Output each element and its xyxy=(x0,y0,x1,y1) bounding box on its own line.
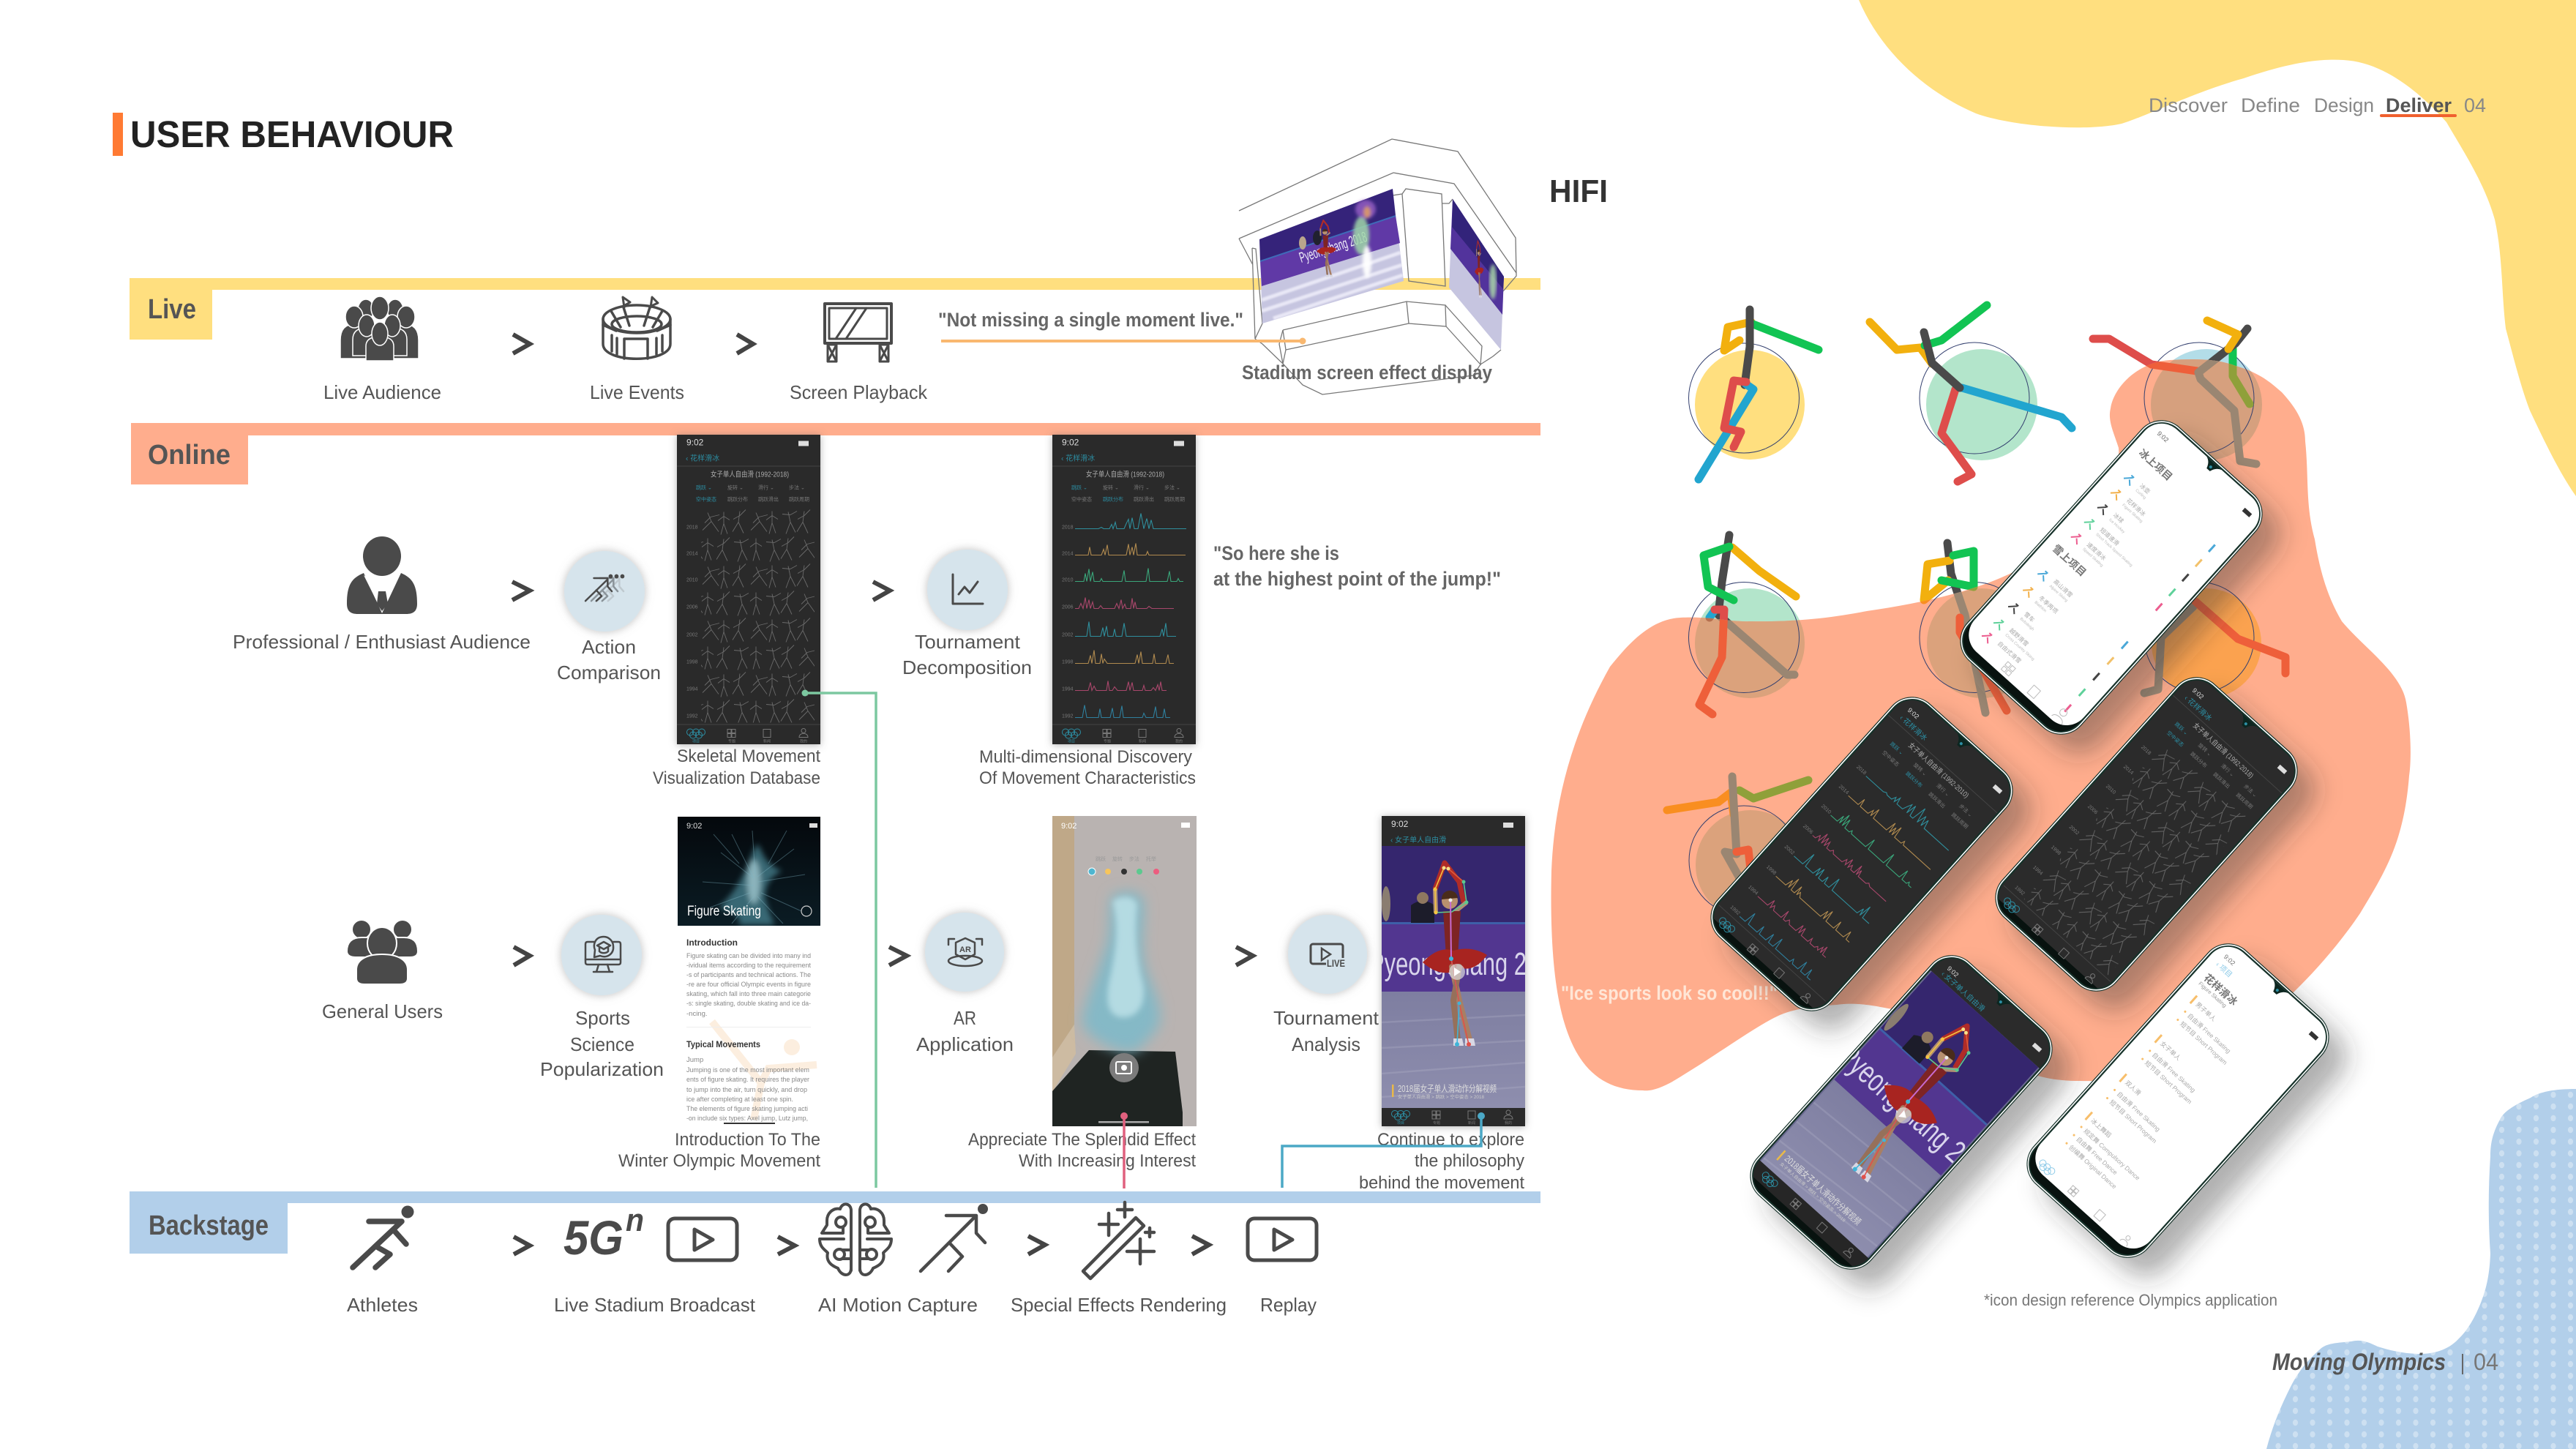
footnote: *icon design reference Olympics application xyxy=(1984,1291,2277,1309)
rotated phone: figure skating list: 自由滑 Free Skating xyxy=(2116,1090,2162,1133)
callout line: live quote to stadium xyxy=(941,338,1306,344)
rotated phone: chart view: 滑行 ⌄ xyxy=(1935,782,1951,798)
rotated phone: skeleton view: 女子单人自由滑 (1992-2018) xyxy=(2191,721,2255,780)
phone: figure skating introduction: -re are four official Olympic events in figure xyxy=(686,981,811,989)
icon: professional audience person xyxy=(347,536,417,614)
rotated phone: sport list: Alpine Skiing xyxy=(2048,584,2068,603)
phone: skeletal movement database: 2006 xyxy=(686,604,698,610)
phone: multi-dimensional discovery charts: 跳跃滑出 xyxy=(1134,496,1154,502)
sports science node: Sports xyxy=(575,1007,630,1029)
phone: multi-dimensional discovery charts: 旋转 ⌄ xyxy=(1103,484,1119,490)
phone: multi-dimensional discovery charts: 1992 xyxy=(1062,714,1074,719)
icon: replay play box xyxy=(1248,1218,1317,1260)
phone: multi-dimensional discovery charts: 跳跃 ⌄ xyxy=(1071,484,1087,490)
phone: AR effect xyxy=(1052,816,1197,1126)
rotated phone: chart view: 9:02 xyxy=(1906,706,1920,720)
phone: skeletal movement database: 跳跃 ⌄ xyxy=(696,484,712,490)
phone: figure skating introduction: Figure skating can be divided into many ind xyxy=(686,952,811,960)
label: General Users xyxy=(322,1000,443,1022)
phone: multi-dimensional discovery charts: 跳跃分布 xyxy=(1103,496,1123,502)
icon: athlete xyxy=(353,1206,414,1268)
rotated phone: skeleton view: 1992 xyxy=(2013,885,2026,896)
icon: 5G: 5G xyxy=(564,1210,624,1265)
backstage row labels: Live Stadium Broadcast xyxy=(554,1294,756,1316)
phone: tournament video analysis: 专题 xyxy=(1433,1120,1440,1126)
section nav: Discover xyxy=(2149,94,2228,116)
icon: motion capture runner xyxy=(921,1204,988,1271)
rotated phone: skeleton view: 2014 xyxy=(2122,764,2134,776)
rotated phone: chart view: 跳跃 ⌄ xyxy=(1889,741,1905,756)
rotated phone: figure skating list: 短节目 Short Program xyxy=(2179,1020,2228,1066)
caption: With Increasing Interest xyxy=(1019,1151,1196,1171)
rotated phone: chart view: 旋转 ⌄ xyxy=(1912,762,1928,777)
arrow xyxy=(512,582,530,600)
salmon background blob xyxy=(1551,359,2411,1090)
phone: skeletal movement database: 项目 xyxy=(692,739,700,744)
rotated phone: figure skating list: 自由舞 Free Dance xyxy=(2075,1135,2119,1176)
rotated phone: figure skating list: ‹ 项目 xyxy=(2214,960,2234,979)
rotated phone: chart view: 空中姿态 xyxy=(1881,749,1901,768)
phone: skeletal movement database: 2002 xyxy=(686,632,698,638)
phone: skeletal movement database: 女子单人自由滑 (1992-2018) xyxy=(711,470,789,479)
section nav: Define xyxy=(2241,94,2300,116)
phone: figure skating introduction: Figure Skating xyxy=(687,904,761,919)
rotated phone: skeleton view: 2002 xyxy=(2068,825,2080,836)
icon: general users xyxy=(347,920,418,984)
phone: figure skating introduction: -ividual items according to the requirement xyxy=(686,962,811,970)
AR application node: Application xyxy=(916,1033,1014,1055)
arrow xyxy=(737,334,753,353)
phone: skeletal movement database: 2018 xyxy=(686,525,698,530)
rotated phone: figure skating list: 规定舞 Compulsory Dance xyxy=(2082,1127,2141,1182)
connector: green line to backstage xyxy=(802,689,876,1188)
caption: Continue to explore xyxy=(1377,1130,1524,1150)
rotated phone: chart view: 女子单人自由滑 (1992-2010) xyxy=(1906,741,1971,800)
rotated phone: skeleton view: 跳跃周期 xyxy=(2234,792,2254,810)
phone: figure skating introduction: Jump xyxy=(686,1056,703,1064)
caption: Appreciate The Splendid Effect xyxy=(968,1130,1196,1150)
phone: skeletal movement database: 我的 xyxy=(800,739,807,744)
phone: figure skating introduction: 9:02 xyxy=(686,822,702,831)
rotated phone: sport list: 9:02 xyxy=(2156,430,2170,443)
rotated phone: figure skating list xyxy=(2015,932,2340,1269)
quote: jump: at the highest point of the jump!" xyxy=(1213,568,1501,590)
phone: skeletal movement database: 滑行 ⌄ xyxy=(758,484,774,490)
backstage row labels: Athletes xyxy=(347,1294,418,1316)
icon: live broadcast play box xyxy=(668,1218,737,1260)
rotated phone: skeleton view: 跳跃分布 xyxy=(2189,750,2209,769)
sports science node xyxy=(540,915,664,1080)
phone: figure skating introduction: to jump into the air, turn quickly, and drop xyxy=(686,1086,807,1094)
phone: tournament video analysis: 新闻 xyxy=(1468,1120,1475,1126)
rotated phone: sport list: 冰球 xyxy=(2112,512,2125,525)
rotated phone: video analysis: 9:02 xyxy=(1946,965,1960,978)
phone: skeletal movement database: 跳跃周期 xyxy=(789,496,809,502)
connector: teal line to backstage xyxy=(1282,1112,1485,1188)
rotated phone: sport list: 雪车 xyxy=(2023,610,2036,624)
caption: Multi-dimensional Discovery xyxy=(979,747,1192,767)
phone: AR effect: 跳跃 旋转 步法 托举 xyxy=(1096,855,1156,862)
phone: multi-dimensional discovery charts: 女子单人自由滑 (1992-2018) xyxy=(1086,470,1164,479)
backstage row labels xyxy=(347,1294,1317,1316)
rotated phone: skeleton view: 2006 xyxy=(2086,804,2098,815)
phone: tournament video analysis: 项目 xyxy=(1397,1121,1404,1126)
rotated phone: chart view: 1998 xyxy=(1765,864,1777,876)
rotated phone: chart view: 2014 xyxy=(1838,784,1849,795)
rotated phone: sport list: 高山滑雪 xyxy=(2052,577,2074,599)
footer brand: Moving Olympics xyxy=(2272,1349,2446,1375)
phone: figure skating introduction: ice after completing at least one spin. xyxy=(686,1096,793,1104)
icon: screen playback board xyxy=(825,304,891,362)
label: Professional / Enthusiast Audience xyxy=(233,631,531,653)
phone: skeletal movement database: 1992 xyxy=(686,714,698,719)
phone: multi-dimensional discovery charts: 我的 xyxy=(1175,739,1183,744)
rotated phone: figure skating list: 冰上舞蹈 xyxy=(2089,1117,2113,1139)
phone: figure skating introduction xyxy=(678,817,820,1126)
rotated phone: chart view: 2018 xyxy=(1855,765,1867,776)
rotated phone: sport list: Biathlon xyxy=(2034,601,2047,613)
phone: multi-dimensional discovery charts: 2010 xyxy=(1062,578,1074,583)
backstage band: Backstage xyxy=(149,1210,269,1241)
phone: multi-dimensional discovery charts: 2006 xyxy=(1062,604,1074,610)
rotated phone: sport list xyxy=(1949,409,2274,746)
yellow background blob xyxy=(1859,0,2576,496)
live row labels: Live Events xyxy=(590,381,684,403)
section nav xyxy=(2149,94,2486,117)
page title: USER BEHAVIOUR xyxy=(130,113,454,155)
phone: skeletal movement database: 旋转 ⌄ xyxy=(727,484,744,490)
phone: AR effect: 9:02 xyxy=(1061,822,1077,831)
stick figures seen through blob xyxy=(1667,305,2285,920)
phone: figure skating introduction: skating, which fall into three main categorie xyxy=(686,990,811,998)
online band: Online xyxy=(148,440,231,471)
phone: tournament video analysis: ‹ 女子单人自由滑 xyxy=(1390,835,1446,845)
phone: figure skating introduction: Jumping is one of the most important elem xyxy=(686,1066,809,1074)
rotated phone: figure skating list: 9:02 xyxy=(2223,953,2236,967)
AR application node: AR xyxy=(959,946,971,954)
rotated phone: chart view: 2002 xyxy=(1783,845,1795,856)
phone: figure skating introduction: ents of figure skating. It requires the player xyxy=(686,1076,809,1084)
rotated phone: figure skating list: 花样滑冰 xyxy=(2201,972,2240,1008)
phone: tournament video analysis: 9:02 xyxy=(1391,819,1409,829)
rotated phone: sport list: Speed Skating xyxy=(2081,547,2104,568)
caption: Of Movement Characteristics xyxy=(979,768,1196,788)
rotated phone: chart view: 1994 xyxy=(1747,885,1759,896)
phone: skeletal movement database: 9:02 xyxy=(686,438,704,448)
phone: skeletal movement database xyxy=(677,435,820,744)
caption: the philosophy xyxy=(1415,1151,1524,1171)
footer brand: 04 xyxy=(2474,1349,2498,1375)
phone: tournament video analysis: 我的 xyxy=(1505,1120,1512,1126)
blue dotted background blob xyxy=(2266,1089,2576,1449)
rotated phone: skeleton view: 9:02 xyxy=(2191,686,2205,700)
phone: skeletal movement database: 2014 xyxy=(686,552,698,556)
stick figure 6 xyxy=(2144,583,2285,698)
rotated phone: skeleton view: 步法 ⌄ xyxy=(2242,783,2258,798)
rotated phone: figure skating list: 男子单人 xyxy=(2194,1000,2218,1023)
live row labels xyxy=(323,381,928,403)
rotated phone: sport list: Curling xyxy=(2134,488,2146,501)
arrow xyxy=(873,582,890,600)
phone: skeletal movement database: 专题 xyxy=(728,739,735,744)
rotated phone: sport list: Cross Country Skiing xyxy=(2004,633,2035,662)
icon: stadium xyxy=(603,297,670,359)
tournament analysis node: Tournament xyxy=(1273,1007,1379,1029)
live row labels: Live Audience xyxy=(323,381,441,403)
rotated phone: sport list: 速度滑冰 xyxy=(2085,541,2108,562)
rotated phone: skeleton view xyxy=(1984,666,2309,1003)
section nav: 04 xyxy=(2464,94,2486,116)
quote on blob: "Ice sports look so cool!!" xyxy=(1561,982,1778,1004)
rotated phone: skeleton view: 2018 xyxy=(2140,745,2152,756)
rotated phone: chart view: ‹ 花样滑冰 xyxy=(1898,713,1929,743)
backstage band xyxy=(130,1191,1540,1254)
action comparison node xyxy=(557,551,661,684)
phone: multi-dimensional discovery charts: 空中姿态 xyxy=(1071,496,1092,502)
phone: multi-dimensional discovery charts: 1994 xyxy=(1062,686,1074,692)
section nav: Deliver xyxy=(2386,94,2452,116)
rotated phone: video analysis: ‹ 女子单人自由滑 xyxy=(1939,969,1987,1014)
rotated phone: chart view: 步法 ⌄ xyxy=(1958,803,1974,818)
caption xyxy=(979,747,1196,788)
rotated phone: sport list: 冬季两项 xyxy=(2037,594,2059,615)
tournament decomposition node: Tournament xyxy=(915,631,1021,653)
phone: multi-dimensional discovery charts: 跳跃周期 xyxy=(1164,496,1185,502)
arrow xyxy=(1236,947,1253,965)
stick figure 5 xyxy=(1920,543,2037,713)
rotated phone: chart view: 跳跃周期 xyxy=(1950,812,1969,830)
rotated phone: skeleton view: 空中姿态 xyxy=(2165,730,2185,748)
phone: skeletal movement database: 新闻 xyxy=(763,739,771,744)
phone: skeletal movement database: ‹ 花样滑冰 xyxy=(686,454,719,463)
HIFI heading: HIFI xyxy=(1549,173,1608,209)
tournament analysis node: Analysis xyxy=(1292,1033,1360,1055)
phone: skeletal movement database: 2010 xyxy=(686,578,698,583)
caption: Visualization Database xyxy=(653,768,820,788)
phone: figure skating introduction: -ncing. xyxy=(686,1010,708,1018)
phone: skeletal movement database: 跳跃滑出 xyxy=(758,496,779,502)
rotated phone: video analysis: Pyeongchang 2 xyxy=(1832,1038,1972,1169)
rotated phone: sport list: Ice Hockey xyxy=(2108,518,2126,534)
rotated phone: chart view: 2010 xyxy=(1820,804,1832,815)
phone: multi-dimensional discovery charts: 9:02 xyxy=(1062,438,1079,448)
phone: tournament video analysis: 女子单人自由滑 > 跳跃 > 空中姿态 > 2018 xyxy=(1398,1094,1485,1100)
live row labels: Screen Playback xyxy=(790,381,928,403)
rotated phone: sport list: Short Track Speed Skating xyxy=(2094,533,2133,568)
rotated phone: sport list: Figure Skating xyxy=(2121,503,2143,524)
arrow xyxy=(514,947,530,965)
quote: jump xyxy=(1213,542,1501,590)
rotated phone: skeleton view: ‹ 花样滑冰 xyxy=(2182,693,2214,723)
rotated phone: figure skating list: 创编舞 Original Dance xyxy=(2067,1144,2118,1190)
caption: behind the movement xyxy=(1359,1173,1524,1193)
stick figure 7 xyxy=(1667,776,1808,920)
rotated phone: chart view: 1992 xyxy=(1729,905,1741,916)
stadium caption: Stadium screen effect display xyxy=(1242,362,1492,383)
rotated phone: skeleton view: 2010 xyxy=(2105,784,2116,795)
rotated phone: figure skating list: 自由滑 Free Skating xyxy=(2186,1012,2232,1055)
rotated phone: sport list: 自由式滑雪 xyxy=(1996,640,2023,664)
phone: skeletal movement database: 空中姿态 xyxy=(696,496,716,502)
caption: Skeletal Movement xyxy=(677,746,820,766)
phone: figure skating introduction: -on include six types: Axel jump, Lutz jump, xyxy=(686,1115,808,1123)
arrow xyxy=(889,947,907,965)
sports science node: Science xyxy=(570,1033,634,1055)
icon: 5G: n xyxy=(626,1202,644,1238)
tournament decomposition node: Decomposition xyxy=(902,656,1032,678)
connector: pink line to backstage xyxy=(1120,1112,1128,1188)
arrow xyxy=(1028,1236,1045,1254)
phone: figure skating introduction: Introduction xyxy=(686,937,738,948)
phone: figure skating introduction: -s: single skating, double skating and ice da- xyxy=(686,1000,811,1008)
phone: multi-dimensional discovery charts: 2002 xyxy=(1062,632,1074,638)
rotated phone: sport list: 雪上项目 xyxy=(2051,542,2089,578)
caption: Winter Olympic Movement xyxy=(618,1151,820,1171)
phone: figure skating introduction: Typical Movements xyxy=(686,1039,760,1049)
arrow xyxy=(1192,1236,1209,1254)
AR application node: AR xyxy=(954,1007,976,1029)
tournament analysis node: LIVE xyxy=(1327,957,1345,969)
rotated phone: sport list: 冰壶 xyxy=(2138,482,2152,495)
tournament analysis node xyxy=(1273,915,1379,1055)
live band: Live xyxy=(148,294,196,325)
phone: multi-dimensional discovery charts: 专题 xyxy=(1104,739,1111,744)
rotated phone: video analysis: 女子单人自由滑 > 跳跃 > 空中姿态 > 2018 xyxy=(1778,1161,1847,1224)
phone: multi-dimensional discovery charts xyxy=(1052,435,1196,744)
rotated phone: skeleton view: 1994 xyxy=(2032,865,2043,877)
rotated phone: figure skating list: 短节目 Short Program xyxy=(2108,1098,2158,1145)
phone: skeletal movement database: 跳跃分布 xyxy=(727,496,748,502)
action comparison node: Comparison xyxy=(557,662,661,684)
backstage row labels: AI Motion Capture xyxy=(818,1294,978,1316)
phone: multi-dimensional discovery charts: 滑行 ⌄ xyxy=(1134,484,1150,490)
rotated phone: skeleton view: 旋转 ⌄ xyxy=(2197,742,2213,757)
phone: figure skating introduction: -s of participants and technical actions. The xyxy=(686,971,811,979)
backstage row labels: Replay xyxy=(1260,1294,1317,1316)
rotated phone: figure skating list: 短节目 Short Program xyxy=(2143,1059,2193,1105)
backstage row labels: Special Effects Rendering xyxy=(1011,1294,1227,1316)
icon: live audience crowd xyxy=(340,296,419,361)
quote: jump: "So here she is xyxy=(1213,542,1339,564)
rotated phone: sport list: 冰上项目 xyxy=(2136,446,2175,483)
rotated phone: skeleton view: 跳跃 ⌄ xyxy=(2174,721,2190,736)
stadium screen illustration xyxy=(1239,139,1516,394)
stick figure 4 xyxy=(1689,535,1805,714)
caption xyxy=(653,746,820,788)
phone: multi-dimensional discovery charts: 1998 xyxy=(1062,660,1074,664)
stick figure 2 xyxy=(1870,305,2072,482)
rotated phone: skeleton view: 跳跃滑出 xyxy=(2212,771,2231,790)
stick figure 1 xyxy=(1689,310,1819,479)
arrow xyxy=(778,1237,795,1254)
caption xyxy=(1359,1130,1524,1193)
sports science node: Popularization xyxy=(540,1058,664,1080)
rotated phone: figure skating list: 双人滑 xyxy=(2124,1079,2143,1097)
rotated phone: chart view: 跳跃分布 xyxy=(1904,770,1924,789)
rotated phone: chart view: 跳跃滑出 xyxy=(1927,791,1947,809)
phone: tournament video analysis xyxy=(1369,816,1527,1126)
caption: Introduction To The xyxy=(675,1130,820,1150)
icon: AI brain xyxy=(820,1204,891,1275)
rotated phone: figure skating list: 自由滑 Free Skating xyxy=(2151,1051,2197,1094)
phone: multi-dimensional discovery charts: 2018 xyxy=(1062,525,1074,530)
icon: effects wand xyxy=(1083,1202,1154,1278)
rotated phone: sport list: 越野滑雪 xyxy=(2008,626,2030,648)
tournament decomposition node xyxy=(902,550,1032,678)
rotated phone: video analysis xyxy=(1734,939,2064,1281)
phone: multi-dimensional discovery charts: 新闻 xyxy=(1139,739,1146,744)
rotated phone: sport list: 花样滑冰 xyxy=(2125,497,2147,517)
phone: multi-dimensional discovery charts: 步法 ⌄ xyxy=(1164,484,1180,490)
phone: skeletal movement database: 1998 xyxy=(686,660,698,664)
phone: tournament video analysis: 2018届女子单人滑动作分解视频 xyxy=(1398,1083,1497,1094)
phone: skeletal movement database: 步法 ⌄ xyxy=(789,484,805,490)
quote: live: "Not missing a single moment live." xyxy=(938,309,1243,331)
rotated phone: chart view: 2006 xyxy=(1802,824,1813,835)
online band xyxy=(131,423,1540,484)
arrow xyxy=(513,334,530,353)
section nav: Design xyxy=(2314,94,2374,116)
phone: multi-dimensional discovery charts: ‹ 花样滑冰 xyxy=(1061,454,1095,463)
rotated phone: figure skating list: 女子单人 xyxy=(2159,1040,2182,1062)
caption xyxy=(618,1130,820,1171)
phone: multi-dimensional discovery charts: 项目 xyxy=(1068,739,1075,744)
rotated phone: skeleton view: 1998 xyxy=(2050,845,2062,856)
phone: multi-dimensional discovery charts: 2014 xyxy=(1062,552,1074,556)
phone: figure skating introduction: The elements of figure skating jumping acti xyxy=(686,1105,808,1113)
caption xyxy=(968,1130,1196,1171)
rotated phone: chart view xyxy=(1699,686,2024,1022)
action comparison node: Action xyxy=(582,636,636,658)
stick figure 3 xyxy=(2093,321,2262,464)
stadium screen illustration: Pyeongchang 2018 xyxy=(1298,229,1369,266)
AR application node xyxy=(916,913,1014,1055)
rotated phone: skeleton view: 滑行 ⌄ xyxy=(2220,763,2236,778)
rotated phone: video analysis: 2018届女子单人滑动作分解视频 xyxy=(1783,1153,1863,1227)
phone: skeletal movement database: 1994 xyxy=(686,686,698,692)
icon: 5G xyxy=(564,1202,644,1265)
live band xyxy=(130,278,1540,340)
rotated phone: figure skating list: Figure Skating xyxy=(2197,980,2228,1008)
rotated phone: sport list: Bobsleigh xyxy=(2018,617,2034,632)
arrow xyxy=(514,1237,530,1254)
rotated phone: sport list: 短道速滑 xyxy=(2099,526,2121,547)
phone: tournament video analysis: Pyeongchang 2 xyxy=(1369,946,1527,982)
